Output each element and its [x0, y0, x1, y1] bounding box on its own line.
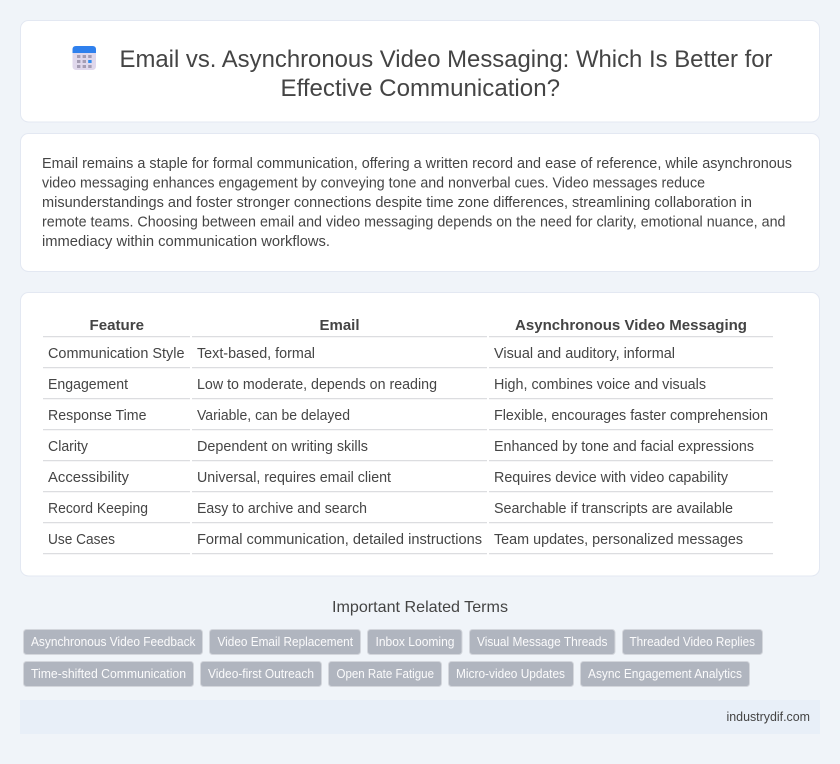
tag: Time-shifted Communication [31, 667, 186, 681]
row: communication style: Communication Style [48, 346, 184, 362]
tags: related terms [24, 630, 762, 686]
panel: description [20, 134, 820, 272]
tag: Async Engagement Analytics [588, 667, 742, 681]
tag: Video Email Replacement [218, 635, 353, 649]
row: record keeping: Easy to archive and search [197, 501, 367, 517]
row: accessibility: Requires device with video capability [494, 470, 729, 486]
description text: remote teams. Choosing between email and video messaging depends on the need for clarity, emotional nuance, and [42, 214, 786, 230]
row: engagement [48, 377, 706, 393]
row: accessibility: Accessibility [48, 470, 130, 486]
row: clarity: Clarity [48, 439, 89, 455]
title: Effective Communication? [280, 75, 560, 102]
description text: immediacy within communication workflows. [42, 234, 330, 250]
row: engagement: High, combines voice and visuals [494, 377, 706, 393]
row: response time: Flexible, encourages faster comprehension [494, 408, 768, 424]
row: clarity: Dependent on writing skills [197, 439, 368, 455]
row: clarity: Enhanced by tone and facial expressions [494, 439, 754, 455]
tag [328, 662, 442, 686]
tag: Video-first Outreach [208, 667, 314, 681]
row: engagement: Low to moderate, depends on reading [197, 377, 437, 393]
panel: header [20, 20, 820, 122]
title [120, 46, 773, 102]
tag [24, 630, 202, 654]
row: accessibility: Universal, requires email client [197, 470, 391, 486]
row: use cases [48, 532, 743, 548]
tag [622, 630, 762, 654]
panel: comparison table [20, 292, 820, 576]
tag: Micro-video Updates [456, 667, 565, 681]
footer [20, 700, 820, 734]
tag: Threaded Video Replies [630, 635, 755, 649]
tag: Visual Message Threads [477, 635, 608, 649]
row: accessibility [48, 470, 729, 486]
tag [470, 630, 615, 654]
description text: video messaging enhances engagement by conveying tone and nonverbal cues. Video messages reduce [42, 176, 705, 192]
row: use cases: Formal communication, detailed instructions [197, 532, 482, 548]
tag [448, 662, 574, 686]
description text: Email remains a staple for formal communication, offering a written record and ease of reference, while asynchronous [42, 156, 792, 172]
row: record keeping: Searchable if transcripts are available [494, 501, 733, 517]
table header: Asynchronous Video Messaging [515, 317, 747, 334]
footer source text: industrydif.com [726, 709, 810, 724]
table header: Feature [90, 317, 144, 334]
icon: calendar [72, 46, 96, 70]
tag [368, 630, 462, 654]
row: response time: Variable, can be delayed [197, 408, 350, 424]
description text [42, 156, 792, 250]
table header: Email [320, 317, 360, 334]
row: clarity [48, 439, 754, 455]
row: use cases: Use Cases [48, 532, 115, 548]
row: response time [48, 408, 768, 424]
row: response time: Response Time [48, 408, 146, 424]
row: communication style [48, 346, 675, 362]
row: use cases: Team updates, personalized messages [494, 532, 743, 548]
tag: Inbox Looming [376, 635, 455, 649]
tag [24, 662, 194, 686]
tag: Asynchronous Video Feedback [31, 635, 196, 649]
tag [200, 662, 322, 686]
heading: important related terms: Important Related Terms [332, 599, 508, 616]
tag [580, 662, 750, 686]
title: Email vs. Asynchronous Video Messaging: Which Is Better for [120, 46, 773, 73]
description text: misunderstandings and foster stronger connections despite time zone differences, streamlining collaboration in [42, 195, 752, 211]
row: communication style: Visual and auditory, informal [494, 346, 675, 362]
tag [210, 630, 360, 654]
row: record keeping: Record Keeping [48, 501, 148, 517]
table header [90, 317, 747, 334]
row: record keeping [48, 501, 733, 517]
tag: Open Rate Fatigue [336, 667, 434, 681]
row: engagement: Engagement [48, 377, 128, 393]
row: communication style: Text-based, formal [197, 346, 315, 362]
